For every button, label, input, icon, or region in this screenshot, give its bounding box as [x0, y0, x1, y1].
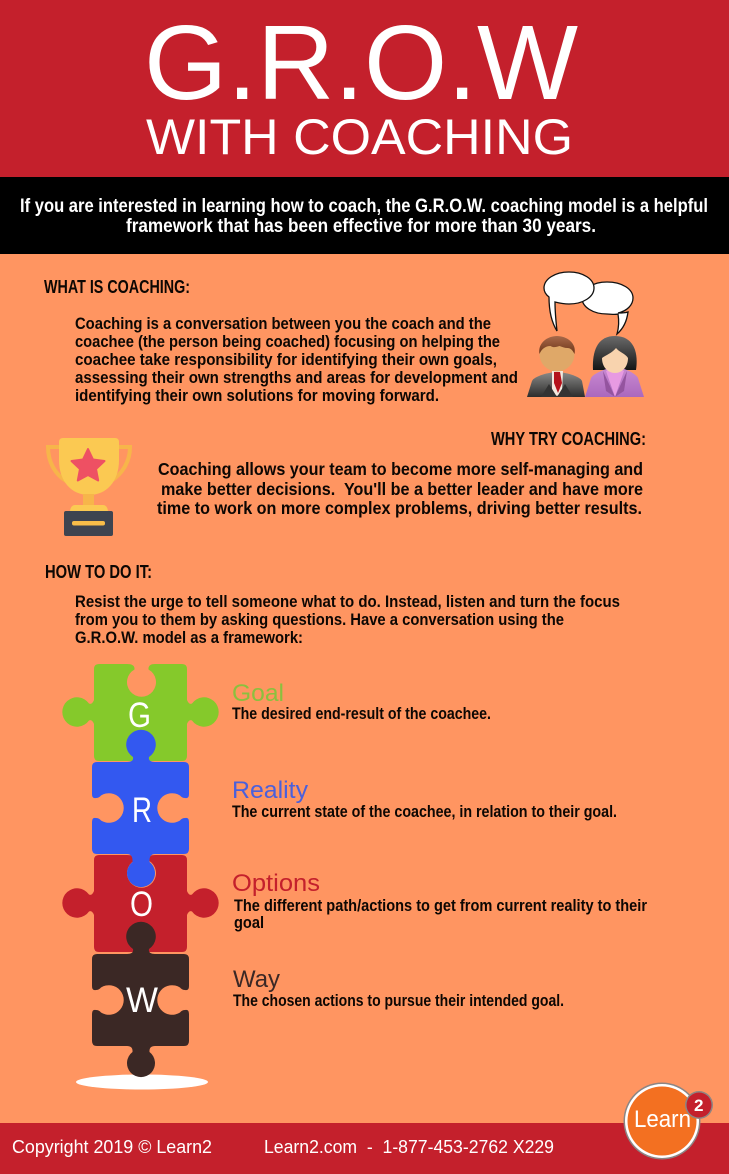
man figure — [527, 336, 585, 397]
subtitle: with coaching: WITH COACHING — [146, 109, 573, 165]
text: how to instructions: from you to them by asking questions. Have a conversation using the — [75, 610, 564, 629]
item: options — [232, 870, 648, 932]
intro band — [0, 177, 729, 254]
item: options: Options — [232, 870, 320, 897]
section: why try coaching — [157, 428, 646, 518]
text: how to instructions — [75, 592, 620, 647]
text: how to instructions: Resist the urge to tell someone what to do. Instead, listen and turn the focus — [75, 592, 620, 611]
title: G.R.O.W: G.R.O.W — [144, 4, 578, 122]
section: what is coaching — [44, 276, 518, 405]
text: coaching definition: coachee take responsibility for identifying their own goals, — [75, 350, 497, 369]
footer bar: Learn2.com - 1-877-453-2762 X229 — [264, 1137, 554, 1157]
icon: coach and coachee with speech bubbles — [527, 272, 644, 397]
item: options: goal — [234, 914, 264, 932]
item: reality — [232, 777, 617, 821]
footer bar: Copyright 2019 © Learn2 — [12, 1137, 212, 1157]
item: goal — [232, 680, 491, 723]
heading: how to do it: HOW TO DO IT: — [45, 561, 152, 582]
item: goal: Goal — [232, 680, 284, 707]
header banner — [0, 0, 729, 177]
text: coaching definition: identifying their own solutions for moving forward. — [75, 386, 439, 405]
puzzle piece: W: W — [126, 981, 158, 1020]
intro band: framework that has been effective for more than 30 years. — [126, 216, 596, 237]
puzzle piece: R: R — [132, 791, 152, 830]
heading: what is coaching: WHAT IS COACHING: — [44, 276, 190, 297]
puzzle piece: O — [62, 855, 219, 952]
icon: trophy — [48, 438, 130, 536]
puzzle piece: O: O — [130, 885, 153, 924]
text: coaching benefits: time to work on more complex problems, driving better results. — [157, 498, 642, 518]
item: way — [233, 966, 564, 1010]
shadow ellipse — [76, 1074, 208, 1090]
text: coaching benefits: make better decisions. You'll be a better leader and have more — [161, 479, 643, 499]
text: coaching benefits: Coaching allows your team to become more self-managing and — [158, 459, 643, 479]
star — [72, 449, 104, 480]
puzzle piece: R — [92, 730, 189, 887]
text: coaching definition: Coaching is a conversation between you the coach and the — [75, 314, 491, 333]
item: way: Way — [233, 966, 280, 993]
woman figure — [585, 336, 644, 397]
text: coaching definition: assessing their own strengths and areas for development and — [75, 368, 518, 387]
item: way: The chosen actions to pursue their intended goal. — [233, 992, 564, 1010]
logo: Learn2: Learn — [634, 1106, 691, 1133]
footer bar — [0, 1123, 729, 1174]
logo: Learn2: 2 — [694, 1096, 704, 1115]
left speech bubble — [544, 272, 594, 331]
text: coaching benefits — [157, 459, 643, 518]
item: goal: The desired end-result of the coachee. — [232, 705, 491, 723]
puzzle piece: G — [62, 664, 219, 761]
text: how to instructions: G.R.O.W. model as a framework: — [75, 628, 303, 647]
item: reality: Reality — [232, 777, 308, 804]
section: how to do it — [45, 561, 620, 647]
puzzle piece: G: G — [128, 696, 151, 735]
item: options: The different path/actions to get from current reality to their — [234, 897, 648, 915]
right speech bubble — [582, 282, 633, 334]
item: reality: The current state of the coachee, in relation to their goal. — [232, 803, 617, 821]
puzzle stack: G R O W — [62, 664, 219, 1090]
text: coaching definition — [75, 314, 518, 405]
puzzle piece: W — [92, 922, 189, 1077]
heading: why try coaching: WHY TRY COACHING: — [491, 428, 646, 449]
logo: Learn2 — [624, 1082, 713, 1160]
text: coaching definition: coachee (the person being coached) focusing on helping the — [75, 332, 500, 351]
